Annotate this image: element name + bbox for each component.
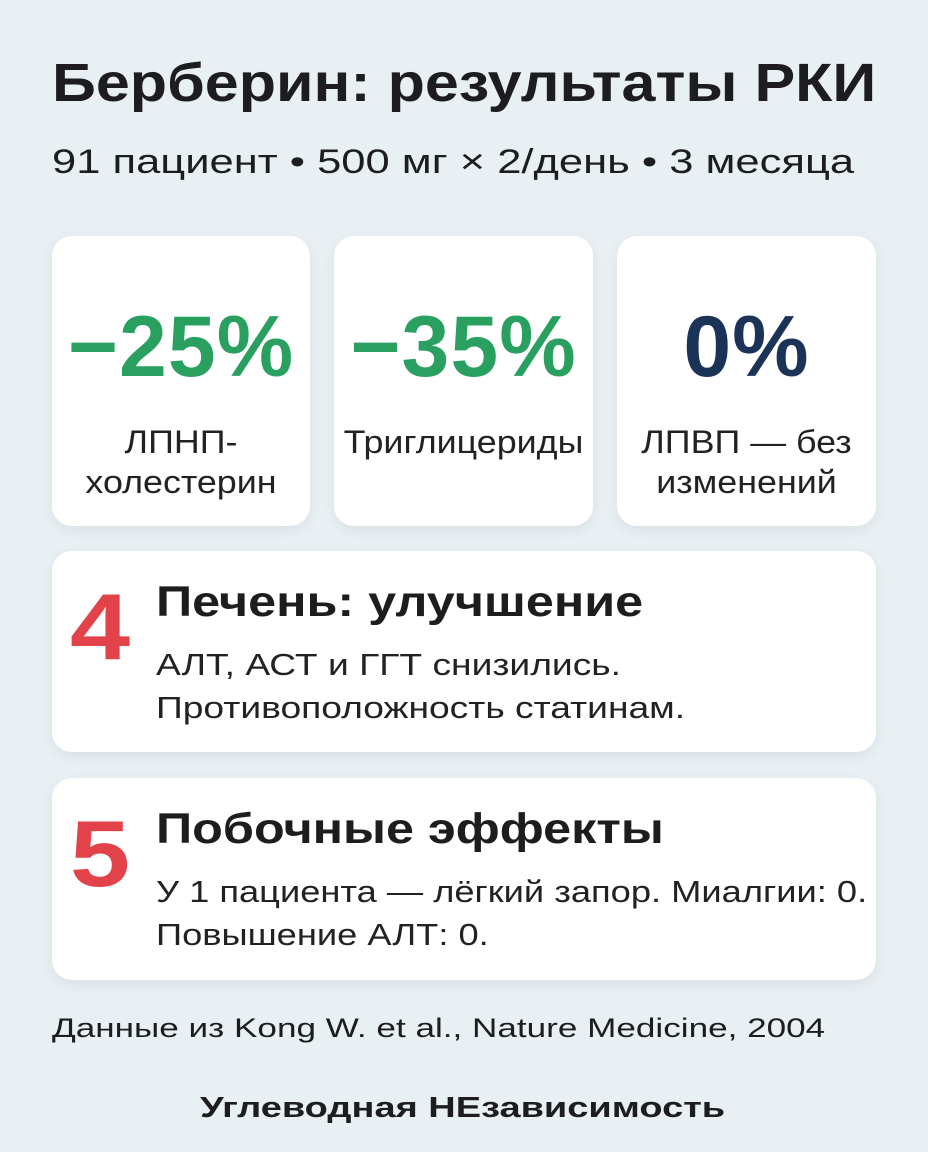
heading: side effects: Побочные эффекты [156,805,664,853]
number 4: 4 [70,574,130,679]
text: side effects: Повышение АЛТ: 0. [156,917,489,952]
stat: -25%: −25% [68,299,294,395]
stat: 0%: 0% [683,299,810,395]
title: Берберин: результаты РКИ [52,53,876,113]
text: liver: Противоположность статинам. [156,690,685,725]
label: HDL: изменений [656,464,837,500]
subtitle: 91 пациент • 500 мг × 2/день • 3 месяца [52,143,854,181]
card: HDL [617,236,876,526]
stat: -35%: −35% [350,299,577,395]
text: side effects: У 1 пациента — лёгкий запор. Миалгии: 0. [156,874,867,909]
text: side effects [156,874,867,952]
card: triglycerides [334,236,593,526]
number 5: 5 [70,801,130,906]
footer brand: Углеводная НЕзависимость [200,1092,725,1124]
panel: side effects [52,778,876,980]
text: liver: АЛТ, АСТ и ГГТ снизились. [156,647,621,682]
heading: liver: Печень: улучшение [156,578,643,626]
label: HDL: ЛПВП — без [641,424,852,460]
card: LDL [52,236,310,526]
label: LDL: ЛПНП- [125,424,237,460]
label: LDL [85,424,277,500]
panel: liver [52,551,876,752]
label: LDL: холестерин [85,464,277,500]
label: HDL [641,424,852,500]
source note: Данные из Kong W. et al., Nature Medicine, 2004 [52,1013,825,1043]
text: liver [156,647,685,725]
label: triglycerides: Триглицериды [344,424,583,460]
